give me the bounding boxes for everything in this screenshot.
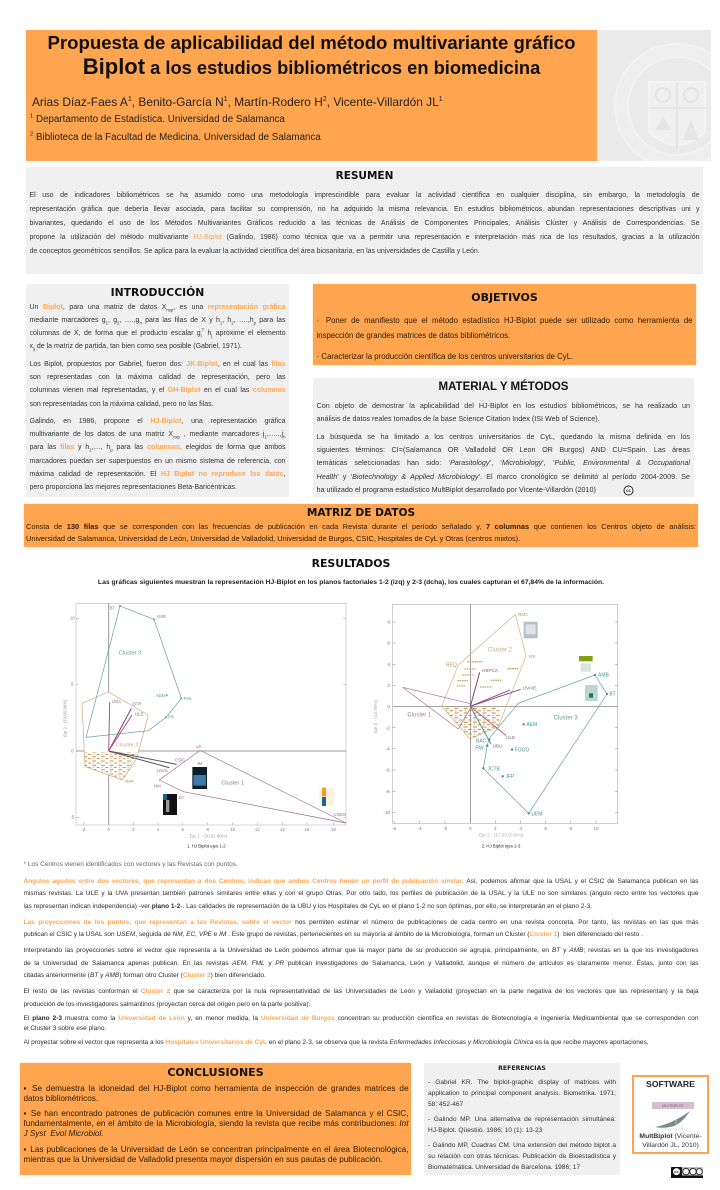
cluster 3 bbox=[475, 673, 616, 818]
heading: resumen: RESUMEN bbox=[336, 170, 393, 182]
cluster 2: Cluster 2 bbox=[116, 743, 139, 749]
introducción text: Un Biplot, para una matriz de datos Xnxp, es una representación gráfica bbox=[30, 304, 285, 312]
panel: referencias bbox=[424, 1063, 620, 1175]
resumen text bbox=[30, 192, 700, 255]
axis tick labels: 2 bbox=[494, 826, 497, 831]
caption: 2. HJ Biplot ejes 2-3 bbox=[482, 843, 521, 848]
axis tick labels: 12 bbox=[255, 827, 260, 832]
axis tick labels: 8 bbox=[387, 620, 390, 625]
vectors: centres: USA bbox=[112, 699, 121, 704]
axis tick labels: 0 bbox=[387, 704, 390, 709]
vectors: centres: OTR bbox=[132, 702, 141, 707]
axis titles bbox=[373, 699, 524, 837]
axis tick labels: -6 bbox=[392, 826, 396, 831]
axis titles: Eje 2 - (17,93 (0,9%)) bbox=[479, 832, 524, 837]
chart: biplot axes 1-2 bbox=[63, 603, 346, 848]
resultados text: Al proyectar sobre el vector que representa a los Hospitales Universitarios de CyL en el plano 2-3, se observa que la revista Enfermedades Infecciosas y Microbiología Clínica es la que recibe mayores aportaciones. bbox=[24, 1039, 649, 1046]
axis titles: Eje 2 - (19,60 96%) bbox=[63, 699, 68, 737]
cluster 3: BAC bbox=[476, 739, 487, 745]
conclusiones text: J Syst Evol Microbiol. bbox=[24, 1129, 104, 1138]
panel: resumen bbox=[26, 167, 703, 274]
resumen text: El uso de indicadores bibliométricos se ha asumido como una metodología imprescindible para evaluar la actividad científica en cualquier disciplina, sin embargo, la metodología de bbox=[30, 192, 700, 199]
introducción text: Los Biplot, propuestos por Gabriel, fueron dos: JK-Biplot, en el cual las filas bbox=[30, 361, 286, 368]
icon: creative commons licence bbox=[671, 1167, 703, 1178]
axis titles bbox=[63, 699, 228, 838]
heading: matriz de datos: MATRIZ DE DATOS bbox=[307, 507, 415, 519]
cluster 3: JFP bbox=[505, 774, 515, 780]
material y métodos text: siguientes términos: CI=(Salamanca OR Valladolid OR Leon OR Burgos) AND CU=Spain. Las áreas bbox=[316, 445, 690, 454]
vectors: centres: ULE bbox=[506, 735, 515, 740]
vectors: centres: USAL bbox=[157, 768, 169, 773]
cluster 3: AEM bbox=[526, 722, 537, 728]
axis tick labels: 18 bbox=[331, 827, 336, 832]
cluster 3 bbox=[86, 605, 193, 737]
resultados text: de la Universidad de Salamanca apenas publican. En las revistas AEM, FML y PR publican investigadores de Salamanca, León y Valladolid, aunque el número de artículos es claramente menor. Éstas, junto con las bbox=[24, 960, 698, 967]
cluster 2: HS bbox=[529, 654, 535, 659]
title: Propuesta de aplicabilidad del método multivariante gráfico bbox=[48, 32, 575, 53]
axis tick labels: 16 bbox=[305, 827, 310, 832]
resultados intro line: Las gráficas siguientes muestran la representación HJ-Biplot en los planos factoriales 1-2 (izq) y 2-3 (dcha), los cuales capturan el 67,84% de la información. bbox=[98, 579, 604, 586]
icon: creative commons licence: cc bbox=[674, 1169, 679, 1174]
axis tick labels: 10 bbox=[70, 616, 75, 621]
axis tick labels: -2 bbox=[386, 725, 390, 730]
panel: material y métodos bbox=[313, 378, 694, 497]
objetivos text: ▪ Poner de manifiesto que el método estadístico HJ-Biplot puede ser utilizado como herramienta de bbox=[316, 316, 692, 325]
cluster 2: Cluster 2 bbox=[488, 648, 513, 654]
resultados text: mismas revistas. La ULE y la UVA presentan también patrones similares entre ellas y con el grupo Otras. Por otro lado, los perfiles de publicación de la USAL y la ULE no son similares (ángulo recto entre los vectores que bbox=[24, 890, 698, 897]
introducción text bbox=[30, 304, 286, 491]
material y métodos text: ha utilizado el programa estadístico MultBiplot desarrollado por Vicente-Villardón (2010) bbox=[316, 485, 596, 494]
cluster 3: Cluster 3 bbox=[554, 715, 578, 721]
title: Biplot a los estudios bibliométricos en biomedicina bbox=[83, 54, 540, 79]
authors: Arias Díaz-Faes A1, Benito-García N1, Martín-Rodero H2, Vicente-Villardón JL1 bbox=[32, 95, 443, 109]
cluster 3: AEM bbox=[156, 693, 165, 698]
axis tick labels: -8 bbox=[386, 789, 390, 794]
vectors: centres: HBPCA bbox=[482, 668, 499, 673]
heading: introducción: INTRODUCCIÓN bbox=[111, 286, 204, 299]
icon: multbiplot logo: MULTBIPLOT bbox=[662, 1104, 685, 1108]
panel: matriz de datos bbox=[24, 504, 698, 547]
resultados text: El plano 2-3 muestra como la Universidad de León y, en menor medida, la Universidad de Burgos concentran su producción científica en revistas de Biotecnología e Ingeniería Medioambiental que se corresponden con bbox=[24, 1015, 698, 1022]
axis titles: Eje 3 - (13,95%) bbox=[373, 699, 378, 733]
axis tick labels: 0 bbox=[107, 827, 110, 832]
axis tick labels: -10 bbox=[383, 810, 390, 815]
conclusiones text: mientras que la Universidad de Valladolid presenta mayor dispersión en sus pautas de publicación. bbox=[24, 1155, 382, 1164]
material y métodos text: temáticas seleccionadas han sido: ‘Parasitology’, ‘Microbiology’, ‘Public, Environmental & Occupational bbox=[316, 458, 690, 467]
resultados text: Interpretando las proyecciones sobre el vector que representa a la Universidad de León podemos afirmar que la mayor parte de su producción se agrupa, principalmente, en BT y AMB; revistas en la que los investigadores bbox=[24, 947, 698, 954]
resultados text bbox=[24, 861, 698, 1046]
vectors: centres: UBU bbox=[493, 744, 503, 749]
axis tick labels: 8 bbox=[206, 827, 209, 832]
axis tick labels: -6 bbox=[386, 768, 390, 773]
panel: objetivos bbox=[313, 284, 696, 365]
axis tick labels: 0 bbox=[71, 748, 74, 753]
affiliations: 1 Departamento de Estadística. Universidad de Salamanca bbox=[30, 114, 285, 125]
resumen text: de conceptos geométricos sencillos. Se aplica para la evaluar la actividad científica del área biosanitaria, en las universidades de Castilla y León. bbox=[30, 248, 480, 255]
referencias text: - Gabriel KR. The biplot-graphic display of matrices with bbox=[428, 1079, 616, 1086]
introducción text: son representadas con la máxima calidad, pero no las filas. bbox=[30, 401, 214, 408]
referencias text: application to principal component analysis. Biometrika. 1971; bbox=[428, 1090, 616, 1097]
vectors: centres bbox=[470, 668, 536, 749]
software caption bbox=[639, 1133, 702, 1149]
vectors: centres: ULE bbox=[135, 712, 144, 717]
objetivos text: ▪ Caracterizar la producción científica de los centros universitarios de CyL. bbox=[316, 352, 573, 360]
affiliations bbox=[30, 114, 321, 143]
resumen text: representación gráfica que debería llevar asociada, para facilitar su comprensión, no ha adquirido la misma relevancia. En estudios bibliométricos abundan representaciones descriptivas uni y bbox=[30, 206, 700, 213]
cluster 1 bbox=[154, 744, 346, 823]
axis tick labels: -2 bbox=[443, 826, 447, 831]
vectors: centres: UVA/E bbox=[523, 686, 536, 691]
cluster 2: RMC bbox=[518, 612, 529, 617]
resultados text: publican el CSIC y la USAL son USEM, seguida de NM, EC, VPE e IM . Este grupo de revistas, pertenecientes en su mayoría al ámbito de la Microbiología, forman un Cluster (Cluster 1) bien diferenciado del resto . bbox=[24, 931, 643, 938]
software caption: MultBiplot (Vicente- bbox=[639, 1133, 702, 1140]
axis tick labels: 10 bbox=[593, 826, 599, 831]
cluster 2 bbox=[82, 692, 148, 783]
referencias text: - Galindo MP. Una alternativa de representación simultánea: bbox=[428, 1116, 616, 1123]
matriz de datos text: Consta de 130 filas que se corresponden con las frecuencias de publicación en cada Revista durante el período señalado y, 7 columnas que contienen los Centros objeto de análisis: bbox=[26, 522, 696, 531]
objetivos text bbox=[316, 316, 692, 360]
cluster 1: NM bbox=[154, 783, 161, 788]
resultados text: * Los Centros vienen identificados con vectores y las Revistas con puntos. bbox=[24, 861, 238, 868]
axis tick labels: 4 bbox=[387, 662, 390, 667]
plot frame bbox=[393, 604, 618, 823]
material y métodos text: análisis de datos reales tomados de la base Science Citation Index (ISI Web of Science). bbox=[316, 414, 600, 423]
icon: multbiplot logo bbox=[652, 1102, 694, 1131]
affiliations: 2 Biblioteca de la Facultad de Medicina. Universidad de Salamanca bbox=[30, 132, 321, 143]
conclusiones text: ▪ Se demuestra la idoneidad del HJ-Biplot como herramienta de inspección de grandes matrices de bbox=[24, 1084, 408, 1093]
journal thumbnails bbox=[163, 767, 334, 815]
resumen text: propone la utilización del método multivariante HJ-Biplot (Galindo, 1986) como técnica que va a permitir una representación e interpretación más rica de los resultados, gracias a la utilización bbox=[30, 234, 700, 241]
cluster 3: FOOD bbox=[515, 748, 529, 754]
cluster 1: Cluster 1 bbox=[221, 780, 244, 786]
conclusiones text: ▪ Se han encontrado patrones de publicación comunes entre la Universidad de Salamanca y el CSIC, bbox=[24, 1109, 408, 1118]
material y métodos text bbox=[316, 401, 690, 494]
panel: software bbox=[632, 1075, 709, 1154]
cluster 1: IM bbox=[197, 761, 203, 766]
caption: 1. HJ Biplot ejes 1-2 bbox=[187, 843, 226, 848]
referencias text bbox=[428, 1079, 616, 1171]
introducción text: marcadores puedan ser superpuestos en un mismo sistema de referencia, con bbox=[30, 458, 286, 465]
introducción text: máxima calidad de representación. El HJ Biplot no reproduce los datos, bbox=[30, 471, 286, 478]
axis tick labels: 10 bbox=[230, 827, 236, 832]
resultados text: citadas anteriormente (BT y AMB) forman otro Cluster (Cluster 3) bien diferenciado. bbox=[24, 972, 266, 979]
axis tick labels: -5 bbox=[70, 815, 75, 820]
cluster 3: UEM bbox=[531, 812, 542, 818]
heading: resultados: RESULTADOS bbox=[312, 557, 390, 570]
conclusiones text: datos bibliométricos. bbox=[24, 1094, 98, 1103]
material y métodos text: La búsqueda se ha limitado a los centros universitarios de CyL, quedando la misma definida en los bbox=[316, 432, 690, 441]
introducción text: columnas vienen mal representadas, y el GH-Biplot en el cual las columnas bbox=[30, 387, 286, 394]
material y métodos text: Health’ y ‘Biotechnology & Applied Microbiology’. El marco cronológico se delimitó al período 2004-2009. Se bbox=[316, 472, 690, 481]
vectors: centres bbox=[109, 699, 185, 773]
software caption: Villardón JL, 2010) bbox=[642, 1142, 699, 1149]
material y métodos text: Con objeto de demostrar la aplicabilidad del HJ-Biplot en los estudios bibliométricos, se ha realizado un bbox=[316, 401, 690, 410]
introducción text: son representadas con la máxima calidad de representación, pero las bbox=[30, 374, 286, 381]
introducción text: para las filas y h1,…, hp para las columnas, elegidos de forma que ambos bbox=[30, 444, 286, 452]
resultados text: El resto de las revistas conforman el Cluster 2 que se caracteriza por la nula representatividad de las Universidades de León y Valladolid (proyectan en la parte negativa de los vectores que las representan) y la baja bbox=[24, 988, 698, 995]
matriz de datos text: Universidad de Salamanca, Universidad de León, Universidad de Valladolid, Universidad de Burgos, CSIC, Hospitales de CyL y Otras (centros mixtos). bbox=[26, 534, 520, 543]
referencias text: 58: 452-467 bbox=[428, 1101, 463, 1108]
cluster 3: BT bbox=[110, 605, 116, 610]
axis tick labels bbox=[383, 620, 599, 831]
objetivos text: inspección de grandes matrices de datos bibliométricos. bbox=[316, 330, 510, 340]
cluster 1 bbox=[403, 687, 470, 729]
cluster 3: AMB bbox=[598, 673, 610, 679]
header panel bbox=[26, 30, 597, 161]
referencias text: su relación con otras técnicas. Publicación de Bioestadística y bbox=[428, 1153, 616, 1160]
resultados text: producción de los investigadores salmantinos (proyectan cerca del origen pero en la parte positiva). bbox=[24, 1001, 310, 1008]
resumen text: bivariantes, quedando el uso de los Métodos Multivariantes Gráficos reducido a las técnicas de Análisis de Componentes Principales, Análisis Clúster y Análisis de Correspondencias. Se bbox=[30, 220, 700, 227]
axis tick labels: 4 bbox=[519, 826, 522, 831]
referencias text: HJ-Biplot. Qüestiió. 1986; 10 (1): 13-23 bbox=[428, 1127, 542, 1134]
heading: referencias: REFERENCIAS bbox=[498, 1065, 546, 1072]
axis tick labels bbox=[70, 616, 336, 832]
introducción text: xij de la matriz de partida, tan bien como sea posible (Gabriel, 1971). bbox=[30, 343, 242, 351]
introducción text: Galindo, en 1986, propone el HJ-Biplot, una representación gráfica bbox=[30, 418, 286, 425]
cluster 2 bbox=[442, 612, 535, 739]
matriz de datos text bbox=[26, 522, 696, 543]
resultados text: las representan indican independencia) -ver plano 1-2-. Las calidades de representación de la UBU y los Hospitales de CyL en el plano 1-2 no son óptimas, por ello, se interpretarán en el plano 2-3. bbox=[24, 903, 592, 910]
introducción text: multivariante de los datos de una matriz Xnxp , mediante marcadores j1,…..,jn bbox=[30, 431, 286, 439]
vectors: centres: CSIC bbox=[175, 758, 185, 763]
icon: cc badge bbox=[624, 486, 634, 496]
cluster 1: VP bbox=[196, 744, 202, 749]
cluster 3: BT bbox=[609, 692, 616, 698]
axis tick labels: -4 bbox=[386, 746, 390, 751]
heading: conclusiones: CONCLUSIONES bbox=[167, 1066, 264, 1079]
title bbox=[48, 32, 575, 79]
axis tick labels: 14 bbox=[280, 827, 285, 832]
resultados text: Ángulos agudos entre dos vectores, que representan a dos Centros, indican que ambos Centros tienen un perfil de publicación similar. Así, podemos afirmar que la USAL y el CSIC de Salamanca publican en las bbox=[24, 878, 698, 885]
chart: biplot axes 2-3 bbox=[373, 604, 618, 848]
resultados text: Las proyecciones de los puntos, que representan a las Revistas, sobre el vector nos permiten estimar el número de publicaciones de cada centro en una revista concreta. Por tanto, las revistas en las que más bbox=[24, 919, 698, 926]
cluster 1: USEM bbox=[333, 812, 346, 817]
cluster 1: Cluster 1 bbox=[407, 713, 432, 719]
axis tick labels: -2 bbox=[81, 827, 86, 832]
panel: introducción bbox=[26, 284, 289, 497]
cluster 2: REQ bbox=[446, 663, 457, 669]
journal thumbnails bbox=[524, 622, 598, 701]
axis tick labels: 4 bbox=[157, 827, 160, 832]
icon: cc badge: cc bbox=[626, 488, 631, 493]
cluster 3: FML bbox=[184, 696, 193, 701]
cluster 3: Cluster 3 bbox=[119, 651, 141, 657]
axis tick labels: 2 bbox=[132, 827, 135, 832]
cluster 2: MAR bbox=[125, 778, 134, 783]
cluster 1: EC bbox=[179, 795, 185, 800]
heading: objetivos: OBJETIVOS bbox=[471, 291, 538, 304]
axis tick labels: 2 bbox=[387, 683, 390, 688]
axis titles: Eje 1 - (30,91 96%) bbox=[190, 833, 228, 838]
plot frame bbox=[76, 603, 346, 825]
cluster 3: PR bbox=[168, 714, 174, 719]
axis tick labels: 6 bbox=[544, 826, 547, 831]
axis tick labels: 8 bbox=[569, 826, 572, 831]
cluster 3: RW bbox=[475, 745, 484, 751]
referencias text: - Galindo MP, Cuadras CM. Una extensión del método biplot a bbox=[428, 1142, 616, 1149]
conclusiones text bbox=[24, 1084, 409, 1164]
introducción text: pero proporciona las mejores representaciones Beta-Baricéntricas. bbox=[30, 484, 237, 491]
conclusiones text: fundamentalmente, en el ámbito de la Microbiología, siendo la revista que recibe más contribuciones: Int bbox=[24, 1119, 408, 1128]
cluster 3: JCTB bbox=[487, 766, 500, 772]
heading: material y métodos: MATERIAL Y MÉTODOS bbox=[439, 381, 568, 393]
panel: conclusiones bbox=[20, 1063, 411, 1175]
referencias text: Biomatemática. Universidad de Barcelona. 1986; 17 bbox=[428, 1164, 580, 1171]
cluster 3: AMB bbox=[156, 614, 166, 619]
axis tick labels: 5 bbox=[71, 682, 74, 687]
introducción text: mediante marcadores g1, g2, ….,gn para las filas de X y h1, h2, ….,hp para las bbox=[30, 317, 286, 325]
axis tick labels: 6 bbox=[181, 827, 184, 832]
resultados text: el Cluster 3 sobre ese plano. bbox=[24, 1025, 106, 1032]
axis tick labels: 6 bbox=[387, 641, 390, 646]
axis tick labels: 0 bbox=[469, 826, 472, 831]
university seal panel bbox=[597, 30, 711, 161]
heading: software: SOFTWARE bbox=[646, 1079, 695, 1089]
conclusiones text: ▪ Las publicaciones de la Universidad de León se concentran principalmente en el área Biotecnológica, bbox=[24, 1145, 408, 1154]
axis tick labels: -4 bbox=[418, 826, 422, 831]
